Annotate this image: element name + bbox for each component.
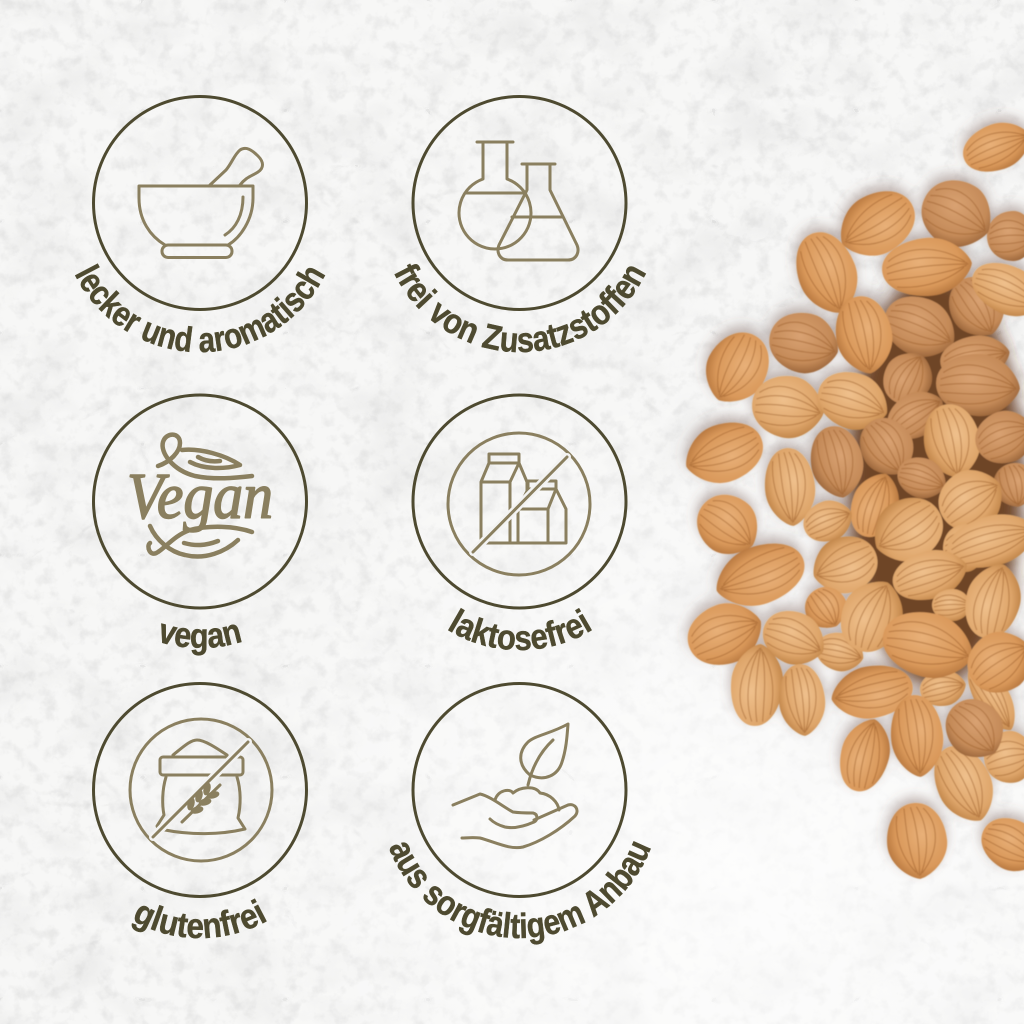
panel: laktosefrei <box>412 394 628 650</box>
label: vegan: vegan <box>161 623 242 656</box>
icon: Vegan script logo <box>127 435 273 557</box>
label: laktosefrei: laktosefrei <box>448 608 592 650</box>
label: aus sorgfältigem Anbau: aus sorgfältigem Anbau <box>390 841 651 945</box>
icon: crossed-out flour sack <box>130 719 272 861</box>
icon: mortar and pestle <box>139 148 262 258</box>
label: glutenfrei: glutenfrei <box>132 898 267 938</box>
icon: hand holding seedling <box>453 724 577 848</box>
photo: pile of apricot kernels <box>676 113 1024 883</box>
panel: glutenfrei <box>92 682 308 938</box>
panel: lecker und aromatisch <box>74 95 326 352</box>
icon: crossed-out milk cartons <box>448 433 590 575</box>
icon: laboratory flasks <box>459 142 578 260</box>
panel: aus sorgfältigem Anbau <box>390 682 651 945</box>
label: frei von Zusatzstoffen: frei von Zusatzstoffen <box>394 264 646 352</box>
panel: vegan <box>92 394 308 656</box>
icon: Vegan script logo: Vegan <box>127 460 273 533</box>
panel: frei von Zusatzstoffen <box>394 95 646 352</box>
label: lecker und aromatisch: lecker und aromatisch <box>74 263 326 352</box>
